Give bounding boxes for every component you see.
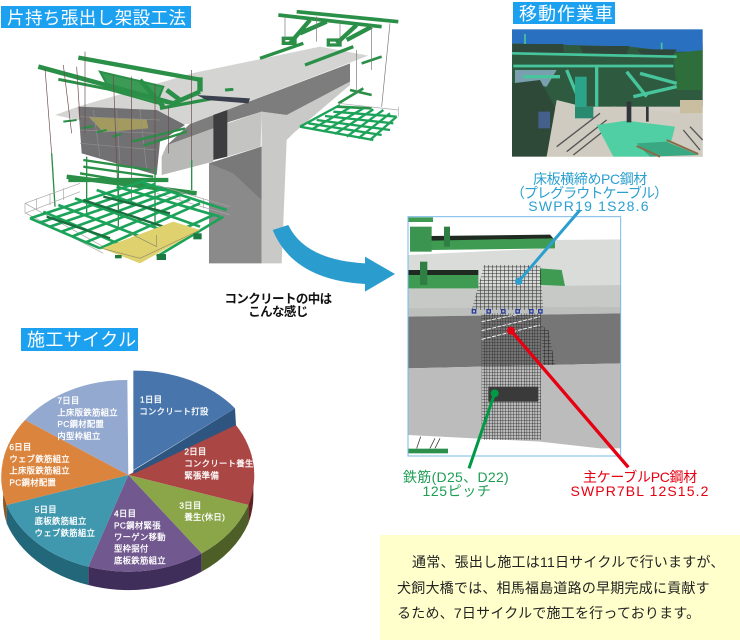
anchor heads xyxy=(472,310,542,313)
formwork block xyxy=(78,107,185,175)
girder lower segments xyxy=(162,128,213,175)
caption: inside the concrete: こんな感じ xyxy=(248,304,308,319)
pie sides xyxy=(3,475,253,590)
panel: rebar detail view xyxy=(408,210,628,468)
illustration: bridge with form travellers xyxy=(25,12,398,263)
callout: deck transverse PC steel label xyxy=(511,171,667,214)
caption: inside the concrete xyxy=(224,291,333,319)
slice labels: 内型枠組立 xyxy=(57,431,101,441)
lower platform guard rail xyxy=(25,183,230,253)
callout: deck transverse PC steel label: （プレグラウトケーブル） xyxy=(511,185,667,201)
slice labels: コンクリート養生 xyxy=(184,459,254,469)
arrow: curved blue arrow to detail view xyxy=(273,225,395,292)
callout: main cable label xyxy=(571,469,709,499)
slice labels: ウェブ鉄筋組立 xyxy=(35,528,95,538)
right traveller xyxy=(260,12,398,108)
slice labels: 5日目 xyxy=(35,504,57,514)
heading: form traveller: 移動作業車 xyxy=(519,4,614,24)
pier xyxy=(209,82,350,263)
frame xyxy=(408,217,621,456)
slice labels: 上床版鉄筋組立 xyxy=(9,466,70,476)
slice labels: コンクリート打設 xyxy=(139,407,209,417)
slice labels: 1日目 xyxy=(140,395,162,405)
slice labels: 上床版鉄筋組立 xyxy=(57,407,118,417)
dark web band xyxy=(408,313,621,368)
joint xyxy=(213,110,227,160)
lower slab xyxy=(408,363,621,448)
lower platform steel grid xyxy=(30,180,227,257)
slice labels: 底板鉄筋組立 xyxy=(35,516,87,526)
callout: rebar label: 125ピッチ xyxy=(423,483,491,499)
slice labels: 3日目 xyxy=(179,501,202,511)
slice labels: 型枠据付 xyxy=(114,544,149,554)
girder web dark band xyxy=(167,63,350,145)
note: cycle explanation: 通常、張出し施工は11日サイクルで行いますが、 xyxy=(412,554,725,570)
callout: deck transverse PC steel label: SWPR19 1S28.6 xyxy=(528,198,650,214)
slice labels: 緊張準備 xyxy=(184,471,219,481)
callout: main cable label: 主ケーブルPC鋼材 xyxy=(583,469,697,485)
right work platform xyxy=(300,105,397,140)
heading: construction cycle: 施工サイクル xyxy=(27,330,136,350)
callout: rebar label xyxy=(403,469,509,499)
rebar cage xyxy=(472,265,555,440)
traveller rails xyxy=(408,217,565,288)
lower platform fragment xyxy=(408,437,448,453)
slice labels: 養生(休日) xyxy=(184,512,225,522)
callout: rebar label: 鉄筋(D25、D22) xyxy=(403,469,509,485)
yellow platform xyxy=(102,222,200,263)
box girder deck top xyxy=(55,47,368,125)
slice labels: 4日目 xyxy=(114,509,136,519)
note: cycle explanation: 犬飼大橋では、相馬福島道路の早期完成に貢献す xyxy=(397,580,710,596)
slice labels: ウェブ鉄筋組立 xyxy=(9,454,70,464)
callout: main cable label: SWPR7BL 12S15.2 xyxy=(571,483,709,499)
slice labels: PC鋼材配置 xyxy=(9,477,56,487)
photo: form traveller on site xyxy=(512,29,703,157)
pie chart: seven-day cycle xyxy=(1,371,254,590)
slices xyxy=(1,371,254,572)
slice labels: PC鋼材配置 xyxy=(57,419,104,429)
slice labels: 2日目 xyxy=(184,447,207,457)
deck surface xyxy=(408,239,621,308)
note: cycle explanation xyxy=(380,535,740,640)
slice labels: 底板鉄筋組立 xyxy=(114,555,166,565)
slice labels: PC鋼材緊張 xyxy=(114,520,161,530)
slice labels: 7日目 xyxy=(57,396,80,406)
slice labels xyxy=(9,395,254,565)
note: cycle explanation: るため、7日サイクルで施工を行っております。 xyxy=(397,605,700,621)
caption: inside the concrete: コンクリートの中は xyxy=(224,291,333,306)
upper work deck xyxy=(67,160,197,193)
slice labels: ワーゲン移動 xyxy=(114,532,166,542)
leader: blue xyxy=(515,210,580,285)
leader: red xyxy=(507,327,628,467)
left traveller xyxy=(38,58,233,146)
heading: cantilever erection method: 片持ち張出し架設工法 xyxy=(7,8,186,28)
callout: deck transverse PC steel label: 床板横締めPC鋼材 xyxy=(533,171,647,187)
slice labels: 6日目 xyxy=(9,442,32,452)
leader: green xyxy=(469,389,499,468)
suspension rods xyxy=(45,52,192,207)
